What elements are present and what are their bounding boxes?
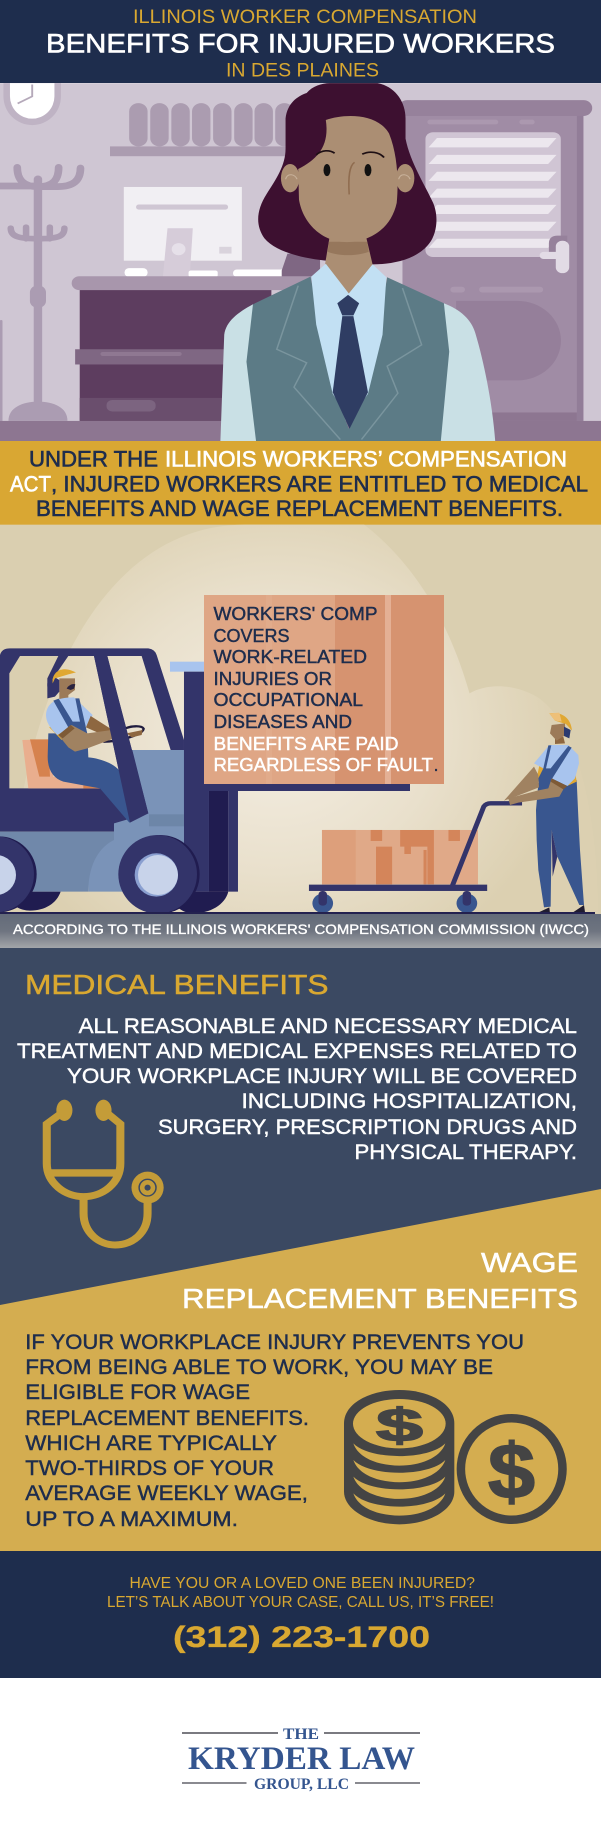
banner: Illinois Workers' Compensation Act statement: ILLINOIS WORKERS’ COMPENSATION [165,446,567,472]
title banner: ILLINOIS WORKER COMPENSATION [133,6,477,28]
worker pushing cart [504,713,585,913]
source strip: IWCC: ACCORDING TO THE ILLINOIS WORKERS' COMPENSATION COMMISSION (IWCC) [13,922,589,937]
footer call to action: HAVE YOU OR A LOVED ONE BEEN INJURED? [130,1575,475,1592]
title banner: BENEFITS FOR INJURED WORKERS [46,28,555,58]
phone number: (312) 223-1700 [173,1621,430,1654]
banner: Illinois Workers' Compensation Act statement [0,441,601,525]
logo: The Kryder Law Group, LLC: THE [283,1726,319,1743]
medical benefits text: TREATMENT AND MEDICAL EXPENSES RELATED TO [17,1040,577,1063]
wage replacement text: REPLACEMENT BENEFITS. [25,1407,309,1430]
forklift with driver [0,648,238,914]
heading: medical benefits: MEDICAL BENEFITS [25,969,328,1000]
blue lift bar [170,662,204,672]
wage replacement text: TWO-THIRDS OF YOUR [25,1457,274,1480]
shelf with binders [110,103,294,156]
title banner [0,0,601,83]
banner: Illinois Workers' Compensation Act statement: ACT [10,472,51,496]
wage replacement text: FROM BEING ABLE TO WORK, YOU MAY BE [25,1356,493,1379]
banner: Illinois Workers' Compensation Act statement: UNDER THE [29,446,158,472]
illustration: office with woman [0,83,601,442]
medical benefits text [17,1015,577,1164]
banner: Illinois Workers' Compensation Act statement: BENEFITS AND WAGE REPLACEMENT BENEFITS. [36,496,563,521]
icon: dollar coin [461,1418,562,1520]
driver [46,669,144,823]
source strip: IWCC [0,914,601,948]
front wheel [118,835,200,914]
medical benefits text: SURGERY, PRESCRIPTION DRUGS AND [158,1116,577,1139]
crate with text: workers' comp coverage: DISEASES AND [214,711,352,732]
ground line [0,912,595,914]
rear wheel [0,836,37,912]
cab pillar front [94,656,148,823]
cart with boxes [309,803,522,913]
illustration: warehouse backdrop and cart [0,525,601,915]
crate with text: workers' comp coverage: REGARDLESS OF FAULT [214,754,433,775]
cab frame [0,648,184,832]
wage replacement text: ELIGIBLE FOR WAGE [25,1381,250,1404]
wage replacement text: WHICH ARE TYPICALLY [25,1432,277,1455]
crate with text: workers' comp coverage: INJURIES OR [214,668,332,689]
wage replacement text: AVERAGE WEEKLY WAGE, [25,1482,308,1505]
crate with text: workers' comp coverage: COVERS [214,625,290,646]
crate with text: workers' comp coverage: OCCUPATIONAL [214,689,363,710]
logo: The Kryder Law Group, LLC: GROUP, LLC [254,1776,349,1793]
banner: Illinois Workers' Compensation Act statement: , INJURED WORKERS ARE ENTITLED TO MEDICAL [51,472,588,496]
title banner: IN DES PLAINES [226,59,379,81]
desk [72,276,321,421]
forklift body [88,750,184,892]
coat rack [0,167,80,421]
icon: wall clock [3,83,61,125]
crate fork rail [204,784,410,791]
warehouse background dome [10,525,598,913]
icon: stethoscope [47,1100,164,1245]
heading: wage replacement benefits: WAGE [481,1247,578,1278]
medical benefits text: INCLUDING HOSPITALIZATION, [242,1090,577,1113]
heading: wage replacement benefits: REPLACEMENT BENEFITS [182,1283,578,1314]
logo: The Kryder Law Group, LLC: KRYDER LAW [188,1741,415,1777]
crate with text: workers' comp coverage: . [434,754,439,775]
logo: The Kryder Law Group, LLC [182,1726,420,1793]
icon: coin stack: $ [376,1399,423,1451]
mast rear [209,791,228,892]
door with window [399,100,592,421]
icon: coin stack [344,1390,454,1524]
footer call to action [0,1551,601,1678]
computer monitor [124,187,320,277]
crate with text: workers' comp coverage: BENEFITS ARE PAID [214,733,398,754]
crate with text: workers' comp coverage: WORK-RELATED [214,646,367,667]
wage replacement text [25,1331,524,1531]
medical benefits text: ALL REASONABLE AND NECESSARY MEDICAL [79,1015,577,1038]
crate with text: workers' comp coverage [204,595,444,784]
wage replacement text: UP TO A MAXIMUM. [25,1508,238,1531]
medical benefits text: YOUR WORKPLACE INJURY WILL BE COVERED [67,1065,577,1088]
panel: wage replacement benefits [0,1189,601,1551]
crate with text: workers' comp coverage: WORKERS' COMP [214,603,378,624]
heading: wage replacement benefits [182,1247,578,1314]
icon: dollar coin: $ [488,1427,535,1515]
woman character [220,83,495,441]
medical benefits text: PHYSICAL THERAPY. [354,1141,577,1164]
wheels behind [7,892,228,913]
panel: medical benefits [0,948,601,1308]
floor [0,421,601,441]
wage replacement text: IF YOUR WORKPLACE INJURY PREVENTS YOU [25,1331,524,1354]
seat [22,739,100,788]
footer call to action: LET’S TALK ABOUT YOUR CASE, CALL US, IT’S FREE! [107,1594,494,1611]
